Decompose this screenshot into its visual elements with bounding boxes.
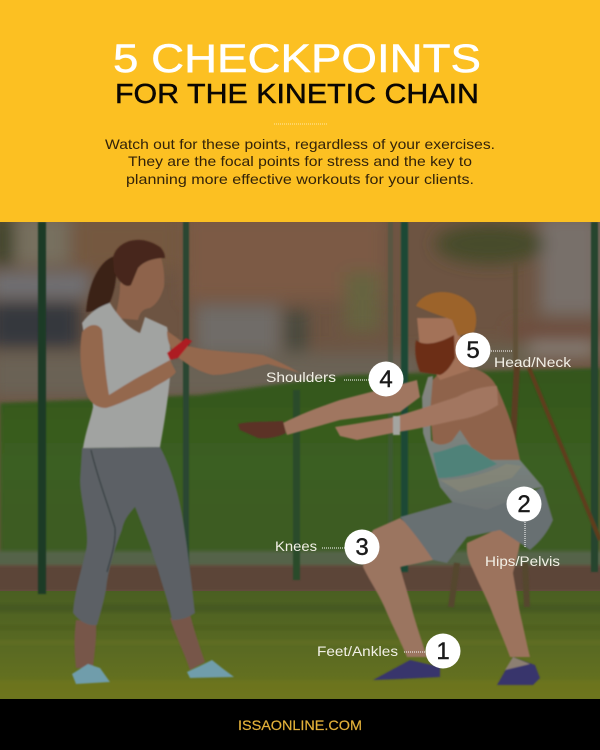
park poles and trees (38, 222, 600, 607)
man squatting (238, 292, 553, 685)
man: far arm (283, 380, 420, 435)
man: near leg (467, 528, 530, 657)
woman: legs (74, 614, 205, 670)
man: torso skin (428, 368, 520, 462)
man: beard (415, 335, 455, 375)
subtitle: for the kinetic chain: FOR THE KINETIC CHAIN (115, 78, 479, 109)
intro text: Watch out for these points, regardless of your exercises. (105, 137, 495, 152)
checkpoint 5: head/neck: Head/Neck (494, 355, 571, 370)
footer bar (0, 699, 600, 750)
photo background: park scene (0, 215, 600, 699)
checkpoint 4: shoulders (266, 362, 404, 396)
intro text (105, 137, 495, 187)
woman: ponytail (86, 256, 116, 312)
woman: leggings (73, 447, 195, 625)
woman: hair (113, 240, 165, 286)
checkpoint 3: knees (275, 530, 380, 564)
checkpoint 2: hips/pelvis (485, 486, 560, 569)
man: far leg (362, 517, 434, 658)
intro text: They are the focal points for stress and the key to (128, 154, 472, 169)
checkpoint 5: head/neck (456, 332, 571, 370)
man: wristband (393, 416, 400, 435)
woman: neck and face (115, 255, 164, 320)
footer url: ISSAONLINE.COM (238, 718, 362, 733)
man: tank top (422, 376, 543, 512)
intro text: planning more effective workouts for your clients. (126, 172, 474, 187)
checkpoint 4: shoulders: Shoulders (266, 370, 336, 385)
man: shorts (400, 487, 553, 563)
man: face and neck (417, 318, 470, 380)
checkpoint 1: feet/ankles: Feet/Ankles (317, 644, 398, 659)
man: shoes (373, 657, 540, 685)
checkpoint 3: knees: Knees (275, 539, 317, 554)
woman: arms (80, 325, 300, 408)
checkpoint 1: feet/ankles: 1 (436, 638, 450, 665)
woman with phone (72, 240, 300, 684)
man: near arm and hand (335, 386, 498, 440)
checkpoint 4: shoulders: 4 (379, 366, 393, 393)
checkpoint 2: hips/pelvis: 2 (517, 491, 531, 518)
checkpoint 2: hips/pelvis: Hips/Pelvis (485, 554, 560, 569)
woman: shoes (72, 660, 234, 684)
woman: shirt (82, 303, 171, 448)
man: hair (416, 292, 476, 336)
header panel (0, 0, 600, 222)
title: 5 checkpoints: 5 CHECKPOINTS (113, 37, 481, 81)
photo panel: two people exercising in a park (0, 215, 600, 699)
checkpoint 5: head/neck: 5 (466, 337, 480, 364)
woman: phone (167, 338, 192, 360)
man: far hand (238, 421, 286, 438)
checkpoint 1: feet/ankles (317, 634, 460, 668)
checkpoint 3: knees: 3 (355, 534, 369, 561)
